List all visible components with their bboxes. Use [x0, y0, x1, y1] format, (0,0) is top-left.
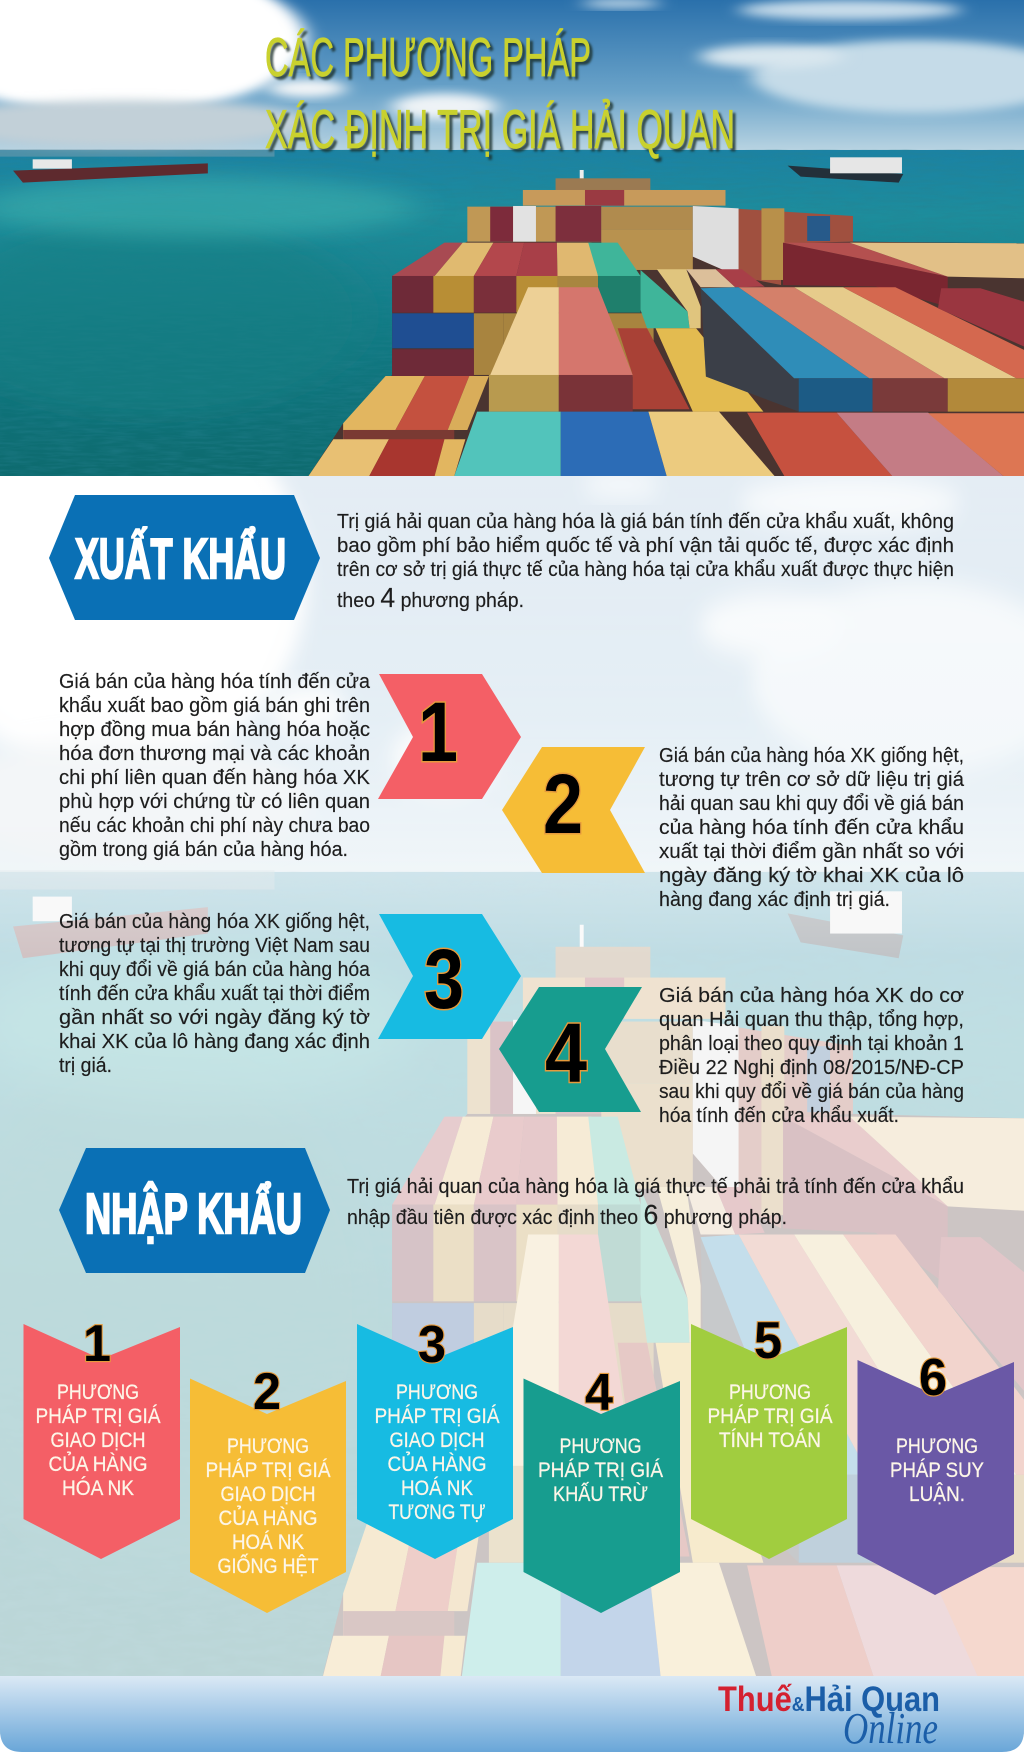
washed sky fade [0, 476, 1024, 956]
logo: Thuế & Hải Quan Online [718, 1680, 940, 1752]
title: XÁC ĐỊNH TRỊ GIÁ HẢI QUAN [265, 98, 735, 160]
banner: import method 3: TƯƠNG TỰ [388, 1501, 486, 1524]
banner: import method 2: CỦA HÀNG [218, 1506, 318, 1530]
banner: import method 5 [691, 1312, 847, 1559]
text: export method 1: gồm trong giá bán của hàng hóa. [59, 838, 348, 861]
banner: import method 1: 1 [83, 1315, 111, 1373]
banner: import method 5: TÍNH TOÁN [719, 1429, 821, 1452]
banner: import method 2: PHÁP TRỊ GIÁ [206, 1459, 330, 1482]
heading badge: xuất khẩu: XUẤT KHẨU [75, 526, 286, 591]
text: export method 2 [659, 744, 965, 911]
arrow: export 2: 2 [543, 757, 583, 851]
text: export method 2: hàng đang xác định trị giá. [659, 888, 890, 911]
washed background photo [0, 388, 1024, 1734]
arrow: export 3: 3 [424, 932, 464, 1026]
banner: import method 1: HÓA NK [62, 1477, 134, 1500]
banner: import method 2 [190, 1363, 346, 1613]
text: export method 2: tương tự trên cơ sở dữ liệu trị giá [659, 768, 965, 791]
logo: Thuế & Hải Quan Online: Online [843, 1704, 938, 1752]
text: export intro: bao gồm phí bảo hiểm quốc tế và phí vận tải quốc tế, được xác định [337, 534, 954, 557]
banner: import method 6: LUẬN. [909, 1483, 965, 1506]
text: export intro: theo 4 phương pháp. [337, 582, 524, 613]
banner: import method 3: PHƯƠNG [396, 1381, 478, 1404]
text: export method 4: quan Hải quan thu thập, tổng hợp, [659, 1008, 964, 1031]
ship deck base [308, 242, 1024, 476]
arrow: export 1: 1 [418, 685, 458, 779]
text: export method 1: hóa đơn thương mại và các khoản [59, 742, 370, 765]
text: export method 3: khai XK của lô hàng đang xác định [59, 1030, 370, 1053]
text: import intro [347, 1175, 964, 1230]
arrow: export 4: 4 [545, 1006, 587, 1100]
text: export method 3: gần nhất so với ngày đăng ký tờ [59, 1006, 370, 1029]
title: CÁC PHƯƠNG PHÁP [265, 26, 591, 88]
text: export method 2: xuất tại thời điểm gần nhất so với [659, 840, 964, 863]
banner: import method 3: GIAO DỊCH [390, 1429, 484, 1452]
text: export method 4: hóa tính đến cửa khẩu xuất. [659, 1104, 899, 1127]
hero photo: container ship at sea [0, 0, 1024, 477]
heading badge: xuất khẩu [49, 495, 320, 620]
banner: import method 3: PHÁP TRỊ GIÁ [374, 1405, 500, 1428]
title [265, 26, 735, 160]
text: export method 4: Giá bán của hàng hóa XK do cơ [659, 984, 964, 1007]
banner: import method 4: PHƯƠNG [560, 1435, 642, 1458]
heading badge: nhập khẩu: NHẬP KHẨU [85, 1181, 302, 1246]
heading badge: nhập khẩu [59, 1148, 330, 1273]
text: export method 3: tương tự tại thị trường Việt Nam sau [59, 934, 370, 957]
text: export method 1: khẩu xuất bao gồm giá bán ghi trên [59, 694, 370, 717]
text: export method 3: tính đến cửa khẩu xuất tại thời điểm [59, 982, 370, 1005]
banner: import method 2: GIAO DỊCH [220, 1483, 316, 1506]
text: export method 2: hải quan sau khi quy đổi về giá bán [659, 792, 964, 815]
arrow: export 3 [378, 914, 521, 1039]
banner: import method 4 [524, 1364, 680, 1613]
text: export method 3: trị giá. [59, 1054, 112, 1077]
text: export method 1 [59, 670, 371, 861]
banner: import method 5: PHÁP TRỊ GIÁ [708, 1405, 832, 1428]
banner: import method 2: HOÁ NK [232, 1531, 304, 1554]
banner: import method 2: GIỐNG HỆT [218, 1554, 319, 1578]
arrow: export 2 [502, 747, 645, 873]
text: export method 3 [59, 910, 371, 1077]
text: export method 2: ngày đăng ký tờ khai XK của lô [659, 864, 964, 887]
banner: import method 4: KHẤU TRỪ [553, 1483, 648, 1506]
banner: import method 6: PHƯƠNG [896, 1435, 978, 1458]
text: export method 1: nếu các khoản chi phí này chưa bao [59, 814, 370, 837]
banner: import method 3: CỦA HÀNG [388, 1452, 486, 1476]
banner: import method 1: PHƯƠNG [57, 1381, 139, 1404]
banner: import method 4: 4 [585, 1364, 613, 1422]
banner: import method 4: PHÁP TRỊ GIÁ [538, 1459, 663, 1482]
text: export intro [337, 510, 954, 613]
banner: import method 2: 2 [253, 1363, 281, 1421]
text: export method 2: của hàng hóa tính đến cửa khẩu [659, 816, 964, 839]
footer band [0, 1676, 1024, 1752]
banner: import method 6 [858, 1349, 1014, 1595]
banner: import method 3: HOÁ NK [401, 1477, 473, 1500]
banner: import method 1: CỦA HÀNG [48, 1452, 148, 1476]
banner: import method 1 [24, 1315, 180, 1559]
text: export method 1: hợp đồng mua bán hàng hóa hoặc [59, 718, 370, 741]
banner: import method 3: 3 [418, 1316, 446, 1374]
banner: import method 3 [357, 1316, 513, 1559]
banner: import method 1: PHÁP TRỊ GIÁ [36, 1405, 160, 1428]
text: export method 4: phân loại theo quy định tại khoản 1 [659, 1032, 964, 1055]
text: export method 1: chi phí liên quan đến hàng hóa XK [59, 766, 370, 789]
text: export method 3: Giá bán của hàng hóa XK giống hệt, [59, 910, 370, 933]
text: export method 4: sau khi quy đổi về giá bán của hàng [659, 1080, 964, 1103]
arrow: export 1 [378, 674, 521, 799]
text: export method 3: khi quy đổi về giá bán của hàng hóa [59, 958, 371, 981]
banner: import method 6: PHÁP SUY [890, 1459, 984, 1482]
banner: import method 2: PHƯƠNG [227, 1435, 309, 1458]
text: export intro: trên cơ sở trị giá thực tế của hàng hóa tại cửa khẩu xuất được thực hiện [337, 558, 954, 581]
arrow: export 4 [499, 987, 642, 1112]
text: export method 4: Điều 22 Nghị định 08/2015/NĐ-CP [659, 1056, 964, 1079]
text: export intro: Trị giá hải quan của hàng hóa là giá bán tính đến cửa khẩu xuất, không [337, 510, 954, 533]
banner: import method 6: 6 [919, 1349, 947, 1407]
banner: import method 5: PHƯƠNG [729, 1381, 811, 1404]
text: export method 1: Giá bán của hàng hóa tính đến cửa [59, 670, 371, 693]
logo: Thuế & Hải Quan Online: Thuế&Hải Quan [718, 1680, 940, 1719]
banner: import method 5: 5 [754, 1312, 782, 1370]
text: import intro: Trị giá hải quan của hàng hóa là giá thực tế phải trả tính đến cửa khẩu [347, 1175, 964, 1198]
banner: import method 1: GIAO DỊCH [50, 1429, 146, 1452]
text: export method 1: phù hợp với chứng từ có liên quan [59, 790, 370, 813]
text: export method 4 [659, 984, 964, 1127]
text: export method 2: Giá bán của hàng hóa XK giống hệt, [659, 744, 964, 767]
text: import intro: nhập đầu tiên được xác định theo 6 phương pháp. [347, 1199, 787, 1230]
